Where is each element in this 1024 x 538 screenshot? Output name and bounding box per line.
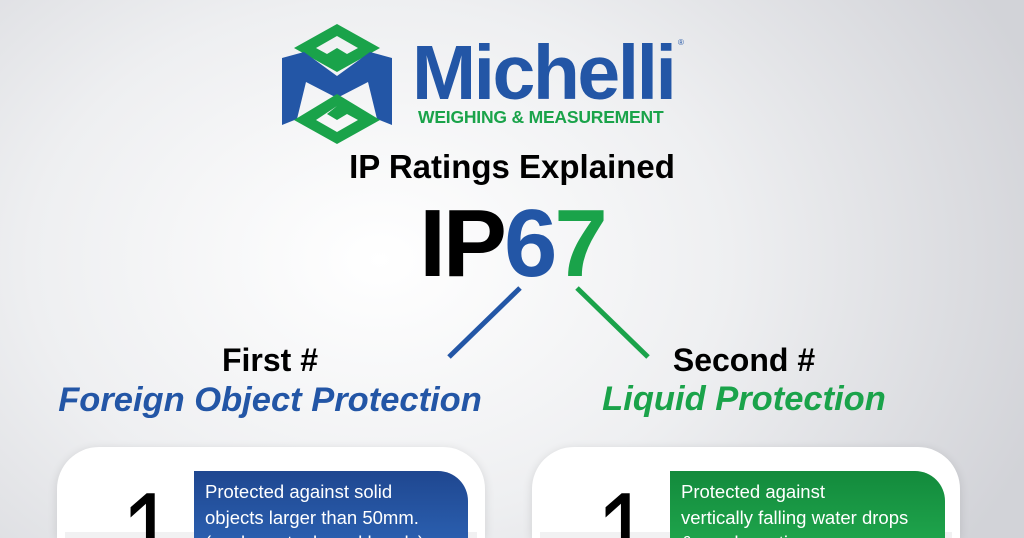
blue description box — [194, 471, 468, 538]
logo wordmark: Michelli — [412, 30, 674, 116]
subtitle: IP Ratings Explained — [349, 148, 675, 185]
logo wordmark: WEIGHING & MEASUREMENT — [418, 107, 663, 127]
panel: second digit card — [532, 447, 960, 538]
right heading: Second # — [673, 342, 815, 378]
right heading: Liquid Protection — [602, 380, 886, 418]
green description box: vertically falling water drops — [681, 506, 908, 528]
logo icon — [282, 24, 392, 144]
green description box: Protected against — [681, 481, 825, 502]
heading IP67: IP67 — [419, 190, 605, 297]
green description box — [670, 471, 945, 538]
left heading: First # — [222, 342, 318, 378]
panel: first digit card — [57, 447, 485, 538]
logo wordmark: ® — [678, 38, 684, 47]
left heading: Foreign Object Protection — [58, 381, 482, 419]
right heading — [602, 342, 886, 418]
left heading — [58, 342, 482, 419]
